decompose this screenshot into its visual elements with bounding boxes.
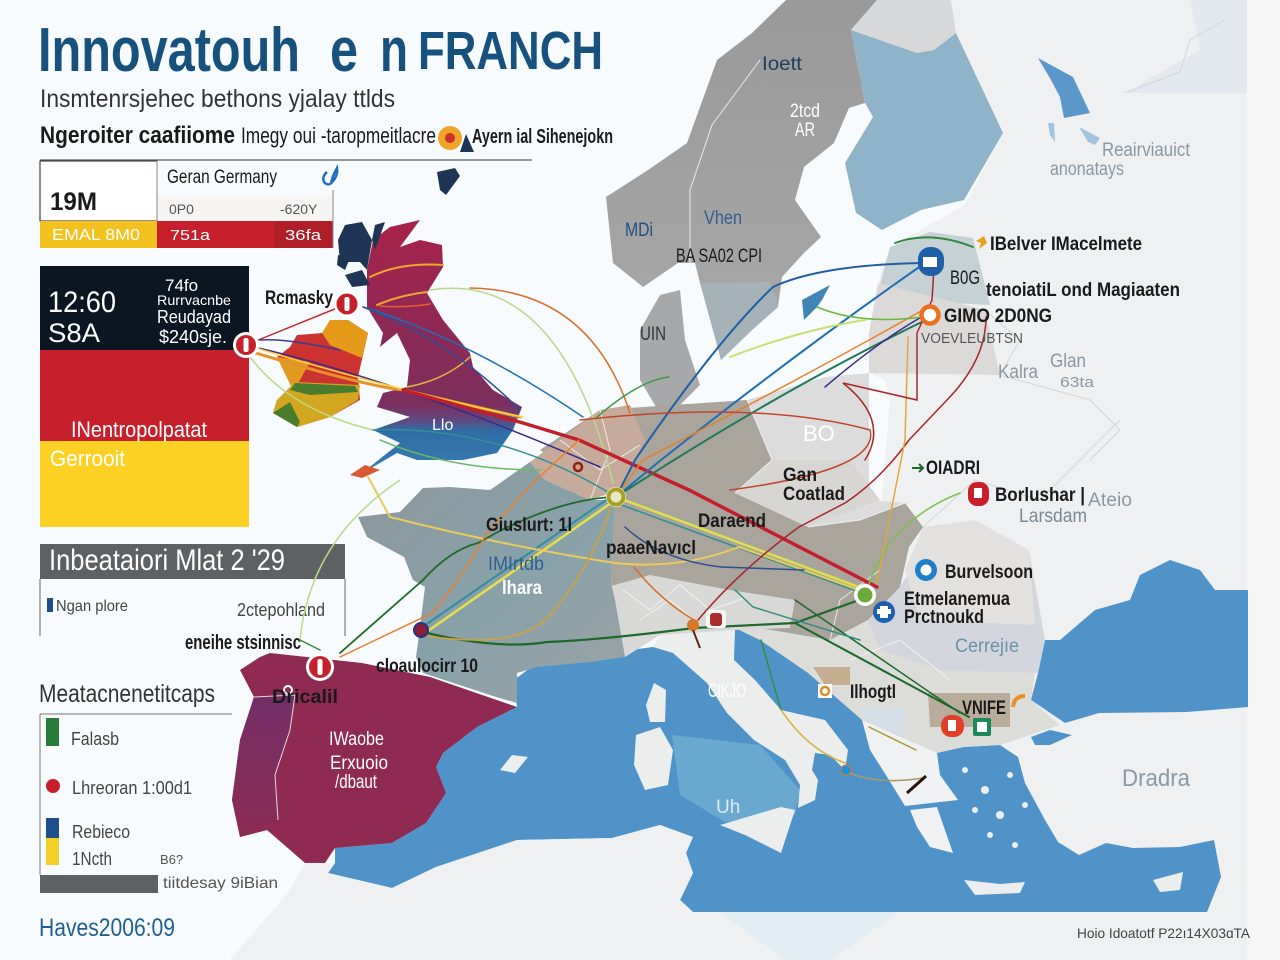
icon: green arrow (912, 464, 923, 472)
panel: Inbeataiori Mlat: Inbeataiori Mlat 2 '29 (49, 544, 285, 577)
sea: Tyrrhenian light patch (672, 735, 800, 822)
map labels: Prctnoukd (904, 607, 984, 628)
map labels: GIMO 2D0NG (944, 306, 1052, 327)
panel: Germany stats: 0P0 (169, 201, 194, 217)
map labels: Dricalil (272, 687, 338, 708)
map labels: Dradra (1122, 765, 1191, 792)
panel: flag block (40, 266, 249, 527)
land: Carpathian light (905, 520, 1035, 625)
map labels: Etmelanemua (904, 589, 1010, 610)
icon: orange arc (1013, 696, 1025, 707)
map labels: anonatays (1050, 159, 1124, 180)
panel: flag block: Gerrooit (50, 446, 125, 471)
map labels: IMIrtdb (488, 554, 544, 575)
map labels: UIN (640, 324, 666, 345)
map labels: Ilhogtl (850, 682, 896, 703)
lake: Gotland (802, 285, 830, 320)
strapline: Ngeroiter caafiiome (40, 122, 235, 149)
land: south Sweden tint (700, 282, 778, 360)
title: e (330, 16, 358, 85)
map labels: Ioett (762, 54, 803, 75)
map labels: Uh (716, 797, 740, 818)
icon: orange star (976, 236, 987, 249)
title: Innovatouh (38, 16, 300, 85)
land: Romania Bulgaria (868, 550, 1045, 673)
map labels: tenoiatiL ond Magiaaten (986, 280, 1180, 301)
map labels: AR (795, 120, 815, 141)
map labels: Ateio (1088, 490, 1132, 511)
map labels: Larsdam (1019, 506, 1087, 527)
panel: Inbeataiori Mlat: Ngan plore (56, 598, 128, 615)
map labels: Cerrejıe (955, 636, 1019, 657)
land: North Africa (230, 825, 1247, 960)
land: Scandinavia (606, 0, 877, 360)
panel: legend (39, 680, 278, 893)
land: Benelux (530, 405, 645, 500)
sea: Black Sea (1031, 560, 1248, 723)
land: Ireland (273, 320, 368, 427)
map labels: B0G (950, 268, 980, 289)
sea: Mediterranean (328, 625, 1221, 912)
panel: legend: Meatacnenetitcaps (39, 680, 215, 708)
map labels: cloaulocirr 10 (376, 656, 478, 677)
city marker: Balkans hub (854, 584, 895, 623)
sea: Marmara (1031, 730, 1072, 745)
map background land: east Europe (869, 0, 1247, 912)
map labels: MDi (625, 220, 653, 241)
city marker: blue east (915, 559, 937, 581)
land: Germany and central Europe (540, 400, 923, 655)
panel: legend: tiitdesay 9iBian (163, 875, 278, 892)
land: Albania (860, 708, 905, 735)
land: Poland (735, 373, 905, 527)
map labels: VOEVLEUBTSN (921, 330, 1023, 347)
map labels (265, 54, 1191, 818)
map labels: VNIFE (962, 698, 1006, 719)
land: Czech light patch (735, 460, 880, 527)
panel: flag block: INentropolpatat (71, 417, 207, 442)
land: Macedonia (928, 693, 1010, 727)
land: northern Italy Alps (597, 575, 795, 657)
panel: flag block: S8A (48, 318, 100, 348)
map labels: CIKJO (708, 681, 746, 702)
lake: small (1048, 123, 1055, 142)
panel: Germany stats: EMAL 8M0 (52, 227, 140, 244)
islands (500, 683, 1183, 895)
city marker: Italy (687, 610, 726, 648)
map labels: Borlushar | (995, 485, 1085, 506)
map background: north-east tint (1125, 0, 1247, 93)
lake: Onega (1038, 58, 1090, 118)
panel: Inbeataiori Mlat (40, 544, 345, 654)
panel: Germany stats: 751a (170, 227, 211, 244)
map labels: Glan (1050, 351, 1086, 372)
map labels: /dbaut (335, 772, 378, 793)
icon: black stroke (907, 776, 926, 793)
city marker: Spain (306, 653, 334, 681)
land: Lithuania Belarus (869, 283, 1000, 375)
strapline: Imegy oui -taropmeitlacre (241, 123, 436, 148)
land: Estonia Latvia (880, 232, 990, 305)
map labels: IWaobe (329, 729, 384, 750)
map labels: Vhen (704, 208, 742, 229)
land: Spain (232, 653, 517, 863)
panel: Germany stats (40, 160, 532, 248)
land: Finland (845, 30, 1003, 230)
city marker: Baltic orange (922, 306, 938, 324)
panel: Germany stats: -620Y (280, 201, 318, 217)
map labels: BA SA02 CPI (676, 246, 762, 267)
panel: Germany stats: 36fa (285, 227, 322, 244)
map labels: Giuslurt: 1l (486, 515, 572, 536)
land: France (358, 462, 625, 703)
land: Italy (653, 625, 848, 808)
title: n (380, 16, 408, 85)
land: Hebrides (337, 168, 460, 287)
map labels: Kalra (998, 362, 1038, 383)
route lines (246, 237, 986, 781)
map labels: Reairviauict (1102, 140, 1191, 161)
city marker: Adriatic (818, 684, 832, 698)
panel: legend: Falasb (71, 729, 119, 749)
land: Balkans west (735, 620, 1060, 753)
panel: Inbeataiori Mlat: 2ctepohland (237, 600, 325, 620)
panel: flag block: $240sje. (159, 327, 227, 347)
panel: Inbeataiori Mlat: eneihe stsinnisc (185, 632, 301, 654)
panel: Germany stats: Geran Germany (167, 167, 277, 188)
panel: flag block: 12:60 (48, 286, 116, 319)
city marker: Benelux (574, 463, 582, 471)
map labels: Gan (783, 465, 817, 486)
map labels: Llo (432, 417, 453, 434)
icon: blue drop glyph (323, 168, 337, 184)
city marker: Calabria (841, 765, 851, 775)
land: Peloponnese (910, 807, 953, 853)
land: brown Balkan patch (813, 667, 850, 685)
city marker: red east (968, 482, 989, 506)
map labels: OIADRI (926, 458, 980, 479)
city marker: Scotland (334, 291, 360, 317)
map labels: BO (803, 421, 835, 446)
footer left: Haves2006:09 (39, 914, 175, 942)
land: Greece (862, 720, 958, 806)
sea fade south (720, 912, 900, 960)
city marker: France south (414, 623, 428, 637)
city marker: Baltic (918, 247, 944, 276)
fine borders (254, 60, 950, 820)
city marker: small Spain ring (284, 686, 292, 694)
map labels: Daraend (698, 511, 766, 532)
title: FRANCH (418, 21, 603, 81)
panel: legend: B6? (160, 852, 183, 867)
strapline (40, 122, 613, 152)
lake: small east (1079, 127, 1100, 145)
map labels: Rcmasky (265, 288, 333, 309)
panel: flag block: Rurrvacnbe (157, 292, 231, 308)
land: north Sweden light (851, 0, 956, 53)
panel: legend: 1Ncth (72, 849, 112, 869)
panel: legend: Lhreoran 1:00d1 (72, 778, 192, 798)
map labels: Coatlad (783, 484, 845, 505)
land: Portugal (232, 695, 295, 837)
map labels: lhara (502, 578, 542, 599)
land: Cornwall tip (350, 465, 380, 478)
map labels: paaeNavıcl (606, 538, 696, 559)
strapline: Ayern ial Sihenejokn (472, 126, 613, 148)
land: Britain (357, 220, 522, 477)
footer right: Hoio Idoatotf P22ı14X03ɑTA (1077, 925, 1251, 941)
city marker: Ireland west (233, 332, 259, 358)
map labels: Burvelsoon (945, 562, 1033, 583)
panel: Germany stats: 19M (50, 188, 97, 216)
map labels: 2tcd (790, 101, 820, 122)
city marker: central hub (606, 487, 626, 507)
panel: flag block: 74fo (165, 276, 198, 295)
panel: legend: Rebieco (72, 822, 130, 842)
title (38, 16, 603, 85)
right margin strip (1247, 0, 1280, 960)
map labels: 63ta (1060, 374, 1095, 391)
city marker: south-east pair (941, 715, 991, 737)
map labels: IBelver IMacelmete (990, 234, 1142, 255)
panel: flag block: Reudayad (157, 307, 231, 327)
subtitle: Insmtenrsjehec bethons yjalay ttlds (40, 85, 395, 113)
map labels: Erxuoio (330, 753, 388, 774)
land: Denmark (640, 290, 700, 407)
